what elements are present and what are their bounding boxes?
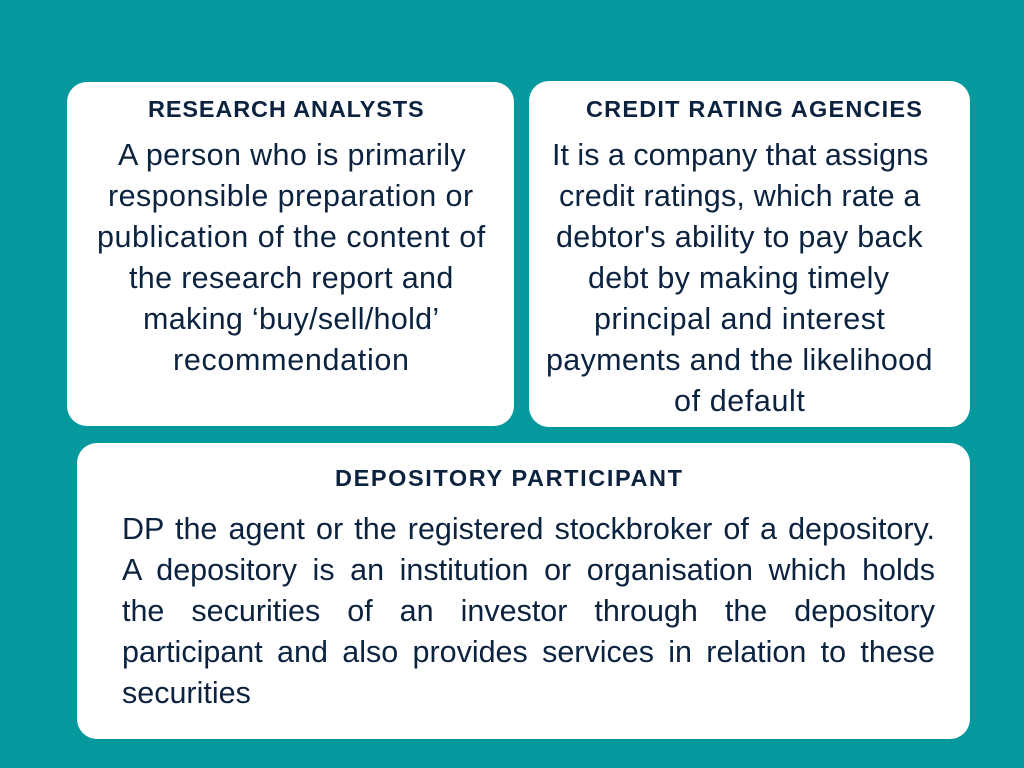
text: credit rating agencies description: [546, 138, 933, 418]
text: research analysts description: responsible preparation or: [108, 179, 474, 213]
text: depository participant description: securities: [122, 676, 251, 710]
heading: research analysts: RESEARCH ANALYSTS: [148, 96, 424, 122]
text: depository participant description: DP the agent or the registered stockbroker of a depository.: [122, 512, 935, 546]
text: credit rating agencies description: debt by making timely: [588, 261, 889, 295]
text: depository participant description: [122, 512, 935, 710]
text: credit rating agencies description: credit ratings, which rate a: [559, 179, 921, 213]
panel: credit rating agencies: [529, 81, 970, 427]
panel: depository participant: [77, 443, 970, 739]
text: research analysts description: the research report and: [129, 261, 454, 295]
panel: research analysts: [67, 82, 514, 426]
text: research analysts description: A person who is primarily: [118, 138, 466, 172]
text: research analysts description: publication of the content of: [97, 220, 486, 254]
heading: credit rating agencies: CREDIT RATING AGENCIES: [586, 96, 923, 122]
text: credit rating agencies description: of default: [674, 384, 806, 418]
text: research analysts description: [97, 138, 486, 377]
text: credit rating agencies description: principal and interest: [594, 302, 885, 336]
text: depository participant description: participant and also provides services in relation to these: [122, 635, 935, 669]
text: credit rating agencies description: debtor's ability to pay back: [556, 220, 923, 254]
text: research analysts description: making ‘buy/sell/hold’: [143, 302, 440, 336]
text: research analysts description: recommendation: [173, 343, 410, 377]
heading: depository participant: DEPOSITORY PARTICIPANT: [335, 465, 684, 491]
text: depository participant description: A depository is an institution or organisation which holds: [122, 553, 935, 587]
text: credit rating agencies description: payments and the likelihood: [546, 343, 933, 377]
text: depository participant description: the securities of an investor through the depository: [122, 594, 935, 628]
text: credit rating agencies description: It is a company that assigns: [552, 138, 928, 172]
